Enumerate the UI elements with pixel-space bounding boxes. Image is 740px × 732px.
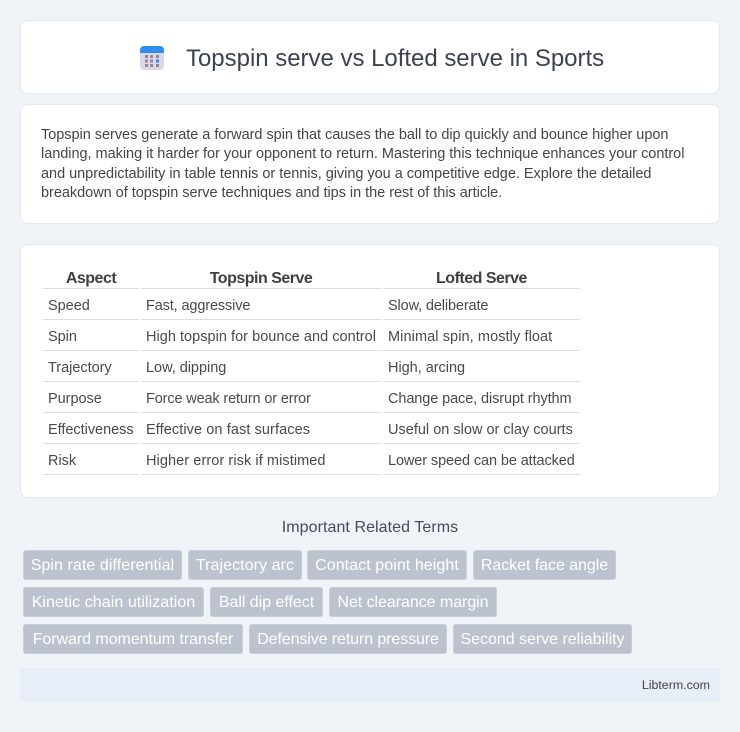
table header — [43, 270, 580, 289]
row: Speed: Fast, aggressive — [146, 298, 250, 314]
row: Speed: Slow, deliberate — [388, 298, 488, 314]
row: Trajectory: High, arcing — [388, 360, 465, 376]
tag — [473, 550, 616, 580]
table header: Topspin Serve — [210, 270, 312, 287]
intro text: breakdown of topspin serve techniques and tips in the rest of this article. — [41, 185, 502, 201]
comparison table panel — [20, 244, 720, 498]
tag — [188, 550, 302, 580]
intro text: and unpredictability in table tennis or tennis, giving you a competitive edge. Explore the detailed — [41, 166, 651, 182]
tag: Defensive return pressure — [257, 631, 439, 648]
row: Effectiveness: Effective on fast surfaces — [146, 422, 310, 438]
tag — [329, 587, 497, 617]
tag — [453, 624, 632, 654]
tag: Net clearance margin — [337, 594, 489, 611]
row: Risk: Lower speed can be attacked — [388, 453, 575, 469]
header panel — [20, 20, 720, 94]
row: Risk: Risk — [48, 453, 76, 469]
row: Spin — [43, 329, 580, 351]
tag: Contact point height — [315, 557, 459, 574]
row: Effectiveness — [43, 422, 580, 444]
row: Effectiveness: Effectiveness — [48, 422, 134, 438]
tag: Racket face angle — [481, 557, 608, 574]
row: Risk — [43, 453, 580, 475]
footer bar — [20, 668, 720, 702]
table header: Aspect — [66, 270, 116, 287]
row: Spin: Spin — [48, 329, 77, 345]
tag: Forward momentum transfer — [33, 631, 233, 648]
tag — [307, 550, 467, 580]
row: Trajectory: Trajectory — [48, 360, 112, 376]
related terms heading: Important Related Terms — [282, 519, 458, 536]
intro text: landing, making it harder for your opponent to return. Mastering this technique enhances your control — [41, 146, 684, 162]
intro panel — [20, 104, 720, 224]
row: Speed: Speed — [48, 298, 90, 314]
row: Risk: Higher error risk if mistimed — [146, 453, 326, 469]
intro text: Topspin serves generate a forward spin that causes the ball to dip quickly and bounce higher upon — [41, 127, 668, 143]
related term tags — [23, 550, 632, 654]
tag: Trajectory arc — [196, 557, 294, 574]
row: Spin: High topspin for bounce and control — [146, 329, 376, 345]
table header: Lofted Serve — [436, 270, 527, 287]
title: Topspin serve vs Lofted serve in Sports — [186, 45, 604, 72]
row: Spin: Minimal spin, mostly float — [388, 329, 552, 345]
tag — [23, 624, 243, 654]
row: Effectiveness: Useful on slow or clay courts — [388, 422, 573, 438]
row: Trajectory: Low, dipping — [146, 360, 226, 376]
row: Purpose: Force weak return or error — [146, 391, 311, 407]
tag — [23, 587, 204, 617]
tag — [249, 624, 447, 654]
tag: Kinetic chain utilization — [32, 594, 195, 611]
icon: calendar — [140, 46, 164, 70]
tag: Spin rate differential — [31, 557, 174, 574]
tag — [210, 587, 323, 617]
row: Speed — [43, 298, 580, 320]
footer credit: Libterm.com — [642, 678, 710, 692]
intro text — [41, 127, 684, 201]
tag: Second serve reliability — [460, 631, 625, 648]
row: Purpose: Change pace, disrupt rhythm — [388, 391, 572, 407]
row: Trajectory — [43, 360, 580, 382]
tag: Ball dip effect — [219, 594, 314, 611]
row: Purpose: Purpose — [48, 391, 102, 407]
tag — [23, 550, 182, 580]
row: Purpose — [43, 391, 580, 413]
